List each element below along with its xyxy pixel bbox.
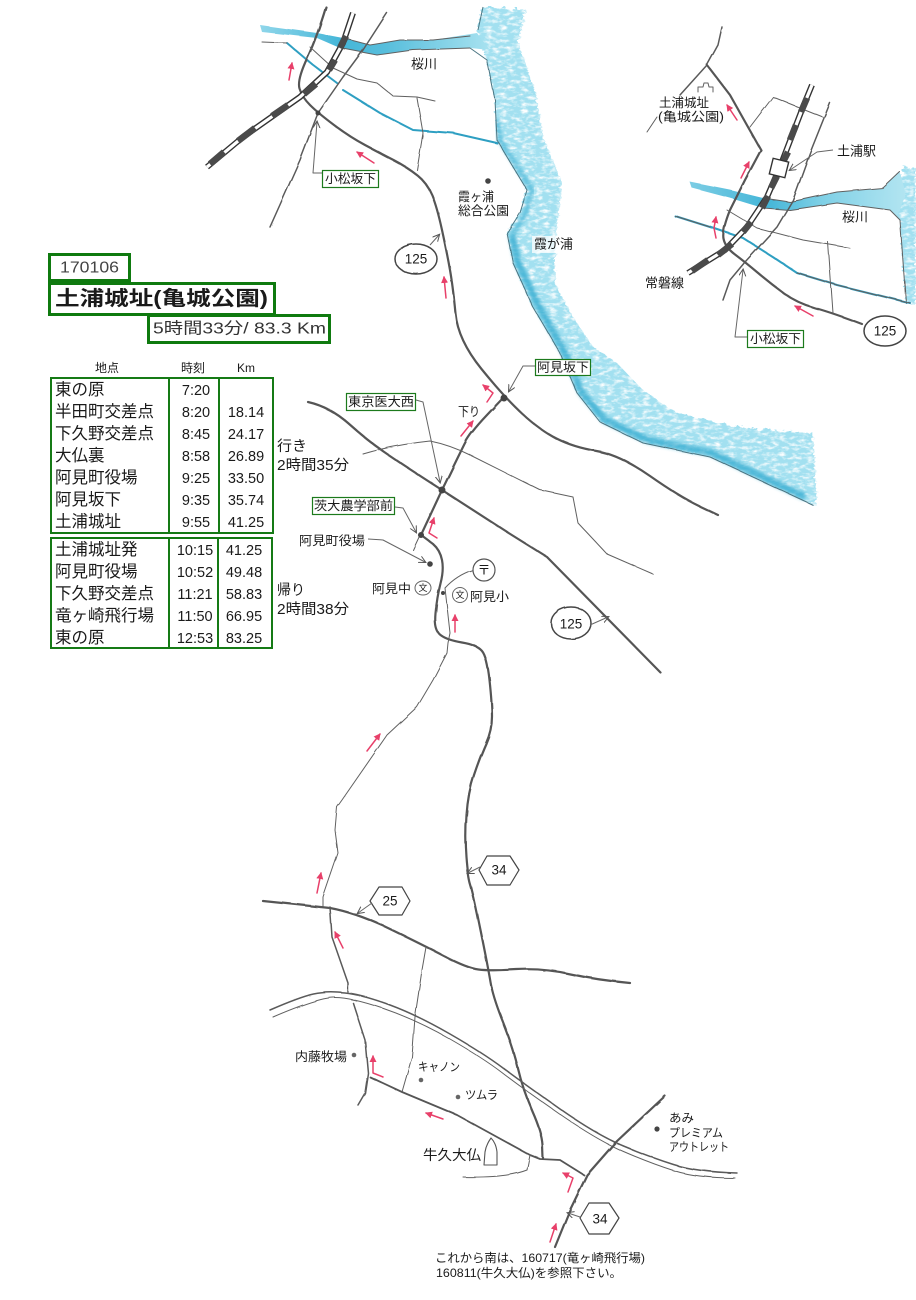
table header: 時刻 <box>181 361 205 375</box>
schedule table: return: 土浦城址発 <box>55 540 138 559</box>
schedule table: outbound: 9:35 <box>182 493 210 509</box>
schedule table: return: 10:52 <box>177 565 213 581</box>
schedule table: outbound: 阿見町役場 <box>55 468 138 487</box>
route sign 25 <box>358 887 410 915</box>
inset lake <box>890 167 916 305</box>
inset roads <box>647 27 862 324</box>
label: Ami elementary: 阿見小 <box>470 590 510 604</box>
main map: rivers <box>260 25 497 143</box>
lake: Kasumigaura <box>470 7 817 505</box>
icon: outlet dot <box>654 1126 660 1132</box>
schedule table: outbound: 8:20 <box>182 405 210 421</box>
label: Naito farm: 内藤牧場 <box>295 1050 347 1064</box>
title <box>50 284 274 314</box>
table header: Km <box>237 361 255 375</box>
schedule table: outbound: 土浦城址 <box>55 512 121 531</box>
label: Kijo park: (亀城公園) <box>658 110 724 124</box>
river: Sakuragawa <box>260 25 490 55</box>
icon: Tsumura dot <box>456 1095 460 1099</box>
icon: school <box>452 588 468 602</box>
schedule table: outbound: 大仏裏 <box>55 446 104 465</box>
schedule table: return: 11:21 <box>177 587 213 603</box>
icon: Naito farm dot <box>352 1053 356 1057</box>
label: Kasumigaura park <box>458 190 509 218</box>
river banks: Sakuragawa <box>340 36 470 55</box>
schedule table: return <box>51 538 272 648</box>
schedule table: outbound: 8:45 <box>182 427 210 443</box>
schedule table: outbound: 18.14 <box>228 405 264 421</box>
schedule table: outbound: 東の原 <box>55 380 104 399</box>
label: Joban line: 常磐線 <box>645 276 684 290</box>
main map: south roads and route <box>263 398 737 1247</box>
schedule table: outbound: 下久野交差点 <box>55 424 154 443</box>
schedule table: return: 阿見町役場 <box>55 562 138 581</box>
schedule table: outbound: 9:25 <box>182 471 210 487</box>
label: Kasumigaura park: 総合公園 <box>458 203 509 218</box>
return duration note: 2時間38分 <box>277 601 350 618</box>
station tag: Tokyo Med West: 東京医大西 <box>348 395 414 409</box>
table header: 地点 <box>95 361 119 375</box>
label: descending: 下り <box>458 405 480 419</box>
schedule table: return: 10:15 <box>177 543 213 559</box>
red direction arrows: main map <box>289 63 573 1242</box>
note: see also: 160811(牛久大仏)を参照下さい。 <box>436 1265 622 1280</box>
date tag: 170106 <box>60 260 119 276</box>
route sign 125 inset: 125 <box>874 324 896 338</box>
icon: post office <box>473 559 495 581</box>
pointer: station <box>790 150 833 170</box>
icon: school: 文 <box>418 582 428 593</box>
label: Sakuragawa: 桜川 <box>411 56 437 72</box>
label: Tsumura: ツムラ <box>465 1088 498 1102</box>
pointer: Ibaraki Univ <box>395 507 416 532</box>
station tag: Ibaraki Univ: 茨大農学部前 <box>314 498 393 513</box>
station tag: Amisakashita: 阿見坂下 <box>537 360 589 374</box>
inset map: Tsuchiura <box>645 27 916 348</box>
icon: post office: 〒 <box>477 562 491 578</box>
inset railway <box>688 85 812 273</box>
route sign 125 north <box>395 235 439 274</box>
schedule table: return: 11:50 <box>177 609 213 625</box>
return duration note: 帰り <box>277 581 305 599</box>
schedule table: outbound: 半田町交差点 <box>55 402 154 421</box>
icon: junction dot <box>441 591 445 595</box>
icon: Ushiku Daibutsu statue <box>484 1138 497 1165</box>
main map: railway <box>207 13 353 167</box>
schedule table: return: 12:53 <box>177 631 213 647</box>
main map: north roads <box>262 7 718 515</box>
schedule table: outbound: 8:58 <box>182 449 210 465</box>
route sign 34 south: 34 <box>592 1212 608 1226</box>
schedule table: outbound: 33.50 <box>228 471 264 487</box>
pointer: Komatsuzakashita main <box>313 122 322 173</box>
route sign 125 north: 125 <box>405 252 427 266</box>
route sign 34 north: 34 <box>491 862 507 878</box>
schedule table: outbound: 9:55 <box>182 515 210 531</box>
pointer: Tokyo Med West <box>416 400 440 482</box>
river: branch <box>287 43 497 143</box>
icon: Tsuchiura station <box>769 158 789 178</box>
red arrows: inset <box>714 105 813 316</box>
schedule table: outbound: 阿見坂下 <box>55 490 121 509</box>
note: see also: これから南は、160717(竜ヶ崎飛行場) <box>435 1250 645 1265</box>
icon: Canon dot <box>419 1078 423 1082</box>
pointer: Ami town office <box>368 539 425 562</box>
label: Ami premium outlet: あみ <box>669 1111 694 1125</box>
icon: school <box>415 581 431 595</box>
station tag: Komatsuzakashita inset: 小松坂下 <box>750 332 801 346</box>
inset rivers <box>675 172 910 303</box>
note: see also <box>435 1250 645 1280</box>
schedule table: return: 41.25 <box>226 543 262 559</box>
pointer: Amisakashita <box>509 366 535 391</box>
schedule table: outbound <box>51 378 273 533</box>
label: Ushiku Daibutsu: 牛久大仏 <box>423 1147 481 1163</box>
route sign 34 north <box>468 856 519 885</box>
route sign 125 inset <box>864 316 906 346</box>
schedule table: outbound: 35.74 <box>228 493 264 509</box>
label: Kasumigaura: 霞が浦 <box>534 236 573 252</box>
junction dots <box>316 110 508 538</box>
title: 土浦城址(亀城公園) <box>55 287 268 310</box>
route sign 125 middle <box>551 607 608 639</box>
schedule table: outbound: 26.89 <box>228 449 264 465</box>
label: Tsuchiura station: 土浦駅 <box>837 144 876 158</box>
schedule table: outbound: 24.17 <box>228 427 264 443</box>
route sign 25: 25 <box>382 894 398 908</box>
total time and distance: 5時間33分/ 83.3 Km <box>153 320 326 338</box>
total time and distance <box>148 316 330 342</box>
schedule table: outbound: 41.25 <box>228 515 264 531</box>
icon: Ami town office dot <box>427 561 433 567</box>
route sign 34 south <box>568 1203 619 1234</box>
station tag: Komatsuzakashita: 小松坂下 <box>325 172 376 186</box>
icon: castle <box>698 83 713 92</box>
label: Sakuragawa inset: 桜川 <box>842 210 868 224</box>
label: Ami junior high: 阿見中 <box>372 581 411 596</box>
label: Kasumigaura park: 霞ヶ浦 <box>458 190 494 204</box>
schedule table: outbound: 7:20 <box>182 383 210 399</box>
outbound duration note: 2時間35分 <box>277 457 350 474</box>
schedule table: return: 竜ヶ崎飛行場 <box>55 606 154 625</box>
icon: school: 文 <box>455 589 465 600</box>
schedule table: return: 83.25 <box>226 631 262 647</box>
outbound duration note: 行き <box>277 438 307 455</box>
schedule table: return: 49.48 <box>226 565 262 581</box>
label: Canon: キャノン <box>418 1060 460 1074</box>
label: Ami premium outlet: プレミアム <box>669 1126 723 1140</box>
route sign 125 middle: 125 <box>560 616 582 632</box>
label: Ami premium outlet: アウトレット <box>669 1140 729 1154</box>
return duration note <box>277 581 350 618</box>
table header <box>95 361 255 375</box>
schedule table: return: 58.83 <box>226 587 262 603</box>
label: Ami town office: 阿見町役場 <box>299 533 365 548</box>
label: Ami premium outlet <box>669 1111 729 1154</box>
label: Tsuchiura castle: 土浦城址 <box>659 96 709 110</box>
pointer: Komatsuzakashita <box>735 270 747 337</box>
outbound duration note <box>277 438 350 474</box>
schedule table: return: 東の原 <box>55 628 104 647</box>
schedule table: return: 66.95 <box>226 609 262 625</box>
icon: park dot <box>485 178 491 184</box>
date tag <box>50 254 130 280</box>
schedule table: return: 下久野交差点 <box>55 584 154 603</box>
